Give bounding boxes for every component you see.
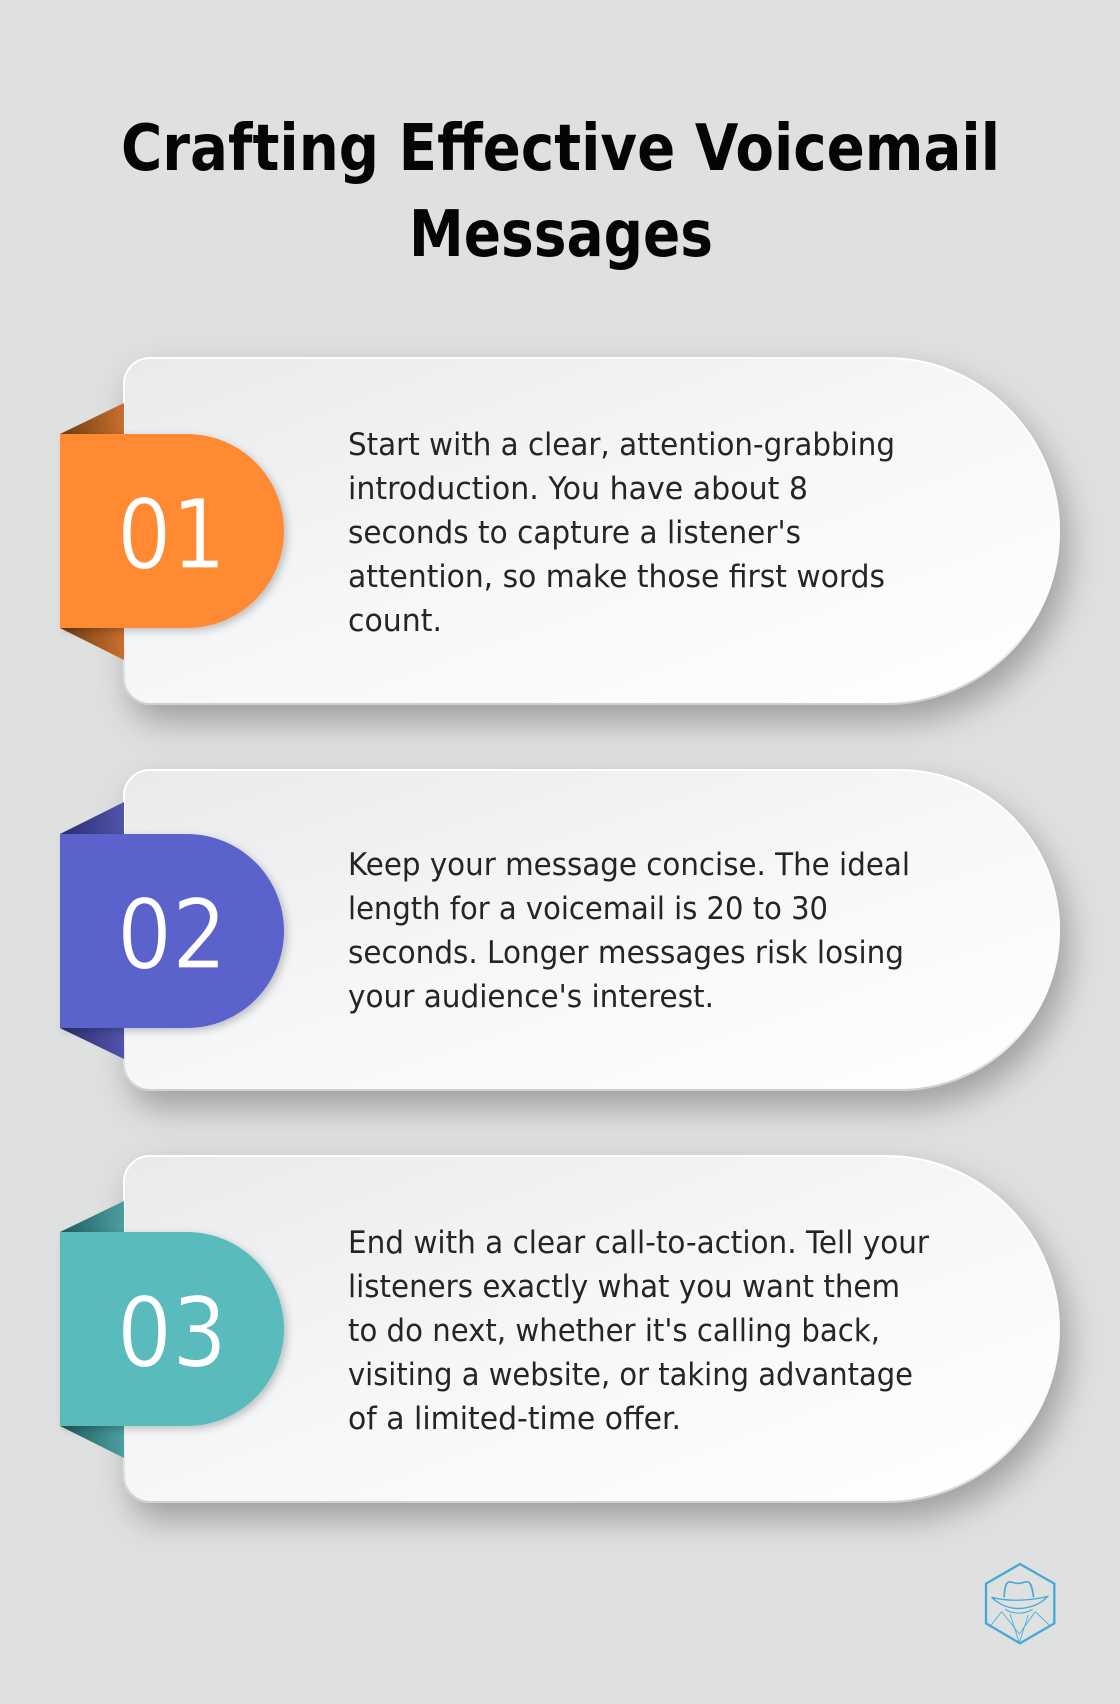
ribbon fold top 3: [60, 1201, 124, 1232]
text block 3: listeners exactly what you want them: [348, 1269, 900, 1305]
number badge 3: [60, 1232, 284, 1426]
text block 3: [348, 1225, 929, 1437]
text block 1: Start with a clear, attention-grabbing: [348, 427, 895, 463]
text block 3: to do next, whether it's calling back,: [348, 1313, 880, 1349]
ribbon fold top 1: [60, 403, 124, 434]
title: Messages: [409, 198, 713, 272]
number 02: 02: [117, 879, 227, 991]
number badge 2: [60, 834, 284, 1028]
text block 1: [348, 427, 895, 639]
number 03: 03: [117, 1277, 227, 1389]
card background 1: [124, 358, 1059, 704]
title: [121, 112, 1000, 272]
number badge 1: [60, 434, 284, 628]
ribbon fold top 2: [60, 802, 124, 834]
panel: step 3: [60, 1156, 1059, 1502]
text block 3: visiting a website, or taking advantage: [348, 1357, 913, 1393]
panel: step 1: [60, 358, 1059, 704]
card background 2: [124, 770, 1059, 1090]
ribbon fold bottom 3: [60, 1426, 124, 1458]
text block 2: your audience's interest.: [348, 979, 714, 1015]
text block 3: of a limited-time offer.: [348, 1401, 681, 1437]
ribbon fold bottom 1: [60, 628, 124, 660]
ribbon fold bottom 2: [60, 1028, 124, 1059]
text block 1: seconds to capture a listener's: [348, 515, 801, 551]
icon: hexagon spy logo: [986, 1564, 1054, 1643]
text block 2: seconds. Longer messages risk losing: [348, 935, 904, 971]
text block 1: count.: [348, 603, 442, 639]
text block 3: End with a clear call-to-action. Tell your: [348, 1225, 929, 1261]
text block 2: [348, 847, 910, 1015]
text block 1: attention, so make those first words: [348, 559, 885, 595]
title: Crafting Effective Voicemail: [121, 112, 1000, 186]
text block 2: Keep your message concise. The ideal: [348, 847, 910, 883]
card background 3: [124, 1156, 1059, 1502]
panel: step 2: [60, 770, 1059, 1090]
number 01: 01: [117, 479, 226, 591]
text block 2: length for a voicemail is 20 to 30: [348, 891, 828, 927]
text block 1: introduction. You have about 8: [348, 471, 808, 507]
